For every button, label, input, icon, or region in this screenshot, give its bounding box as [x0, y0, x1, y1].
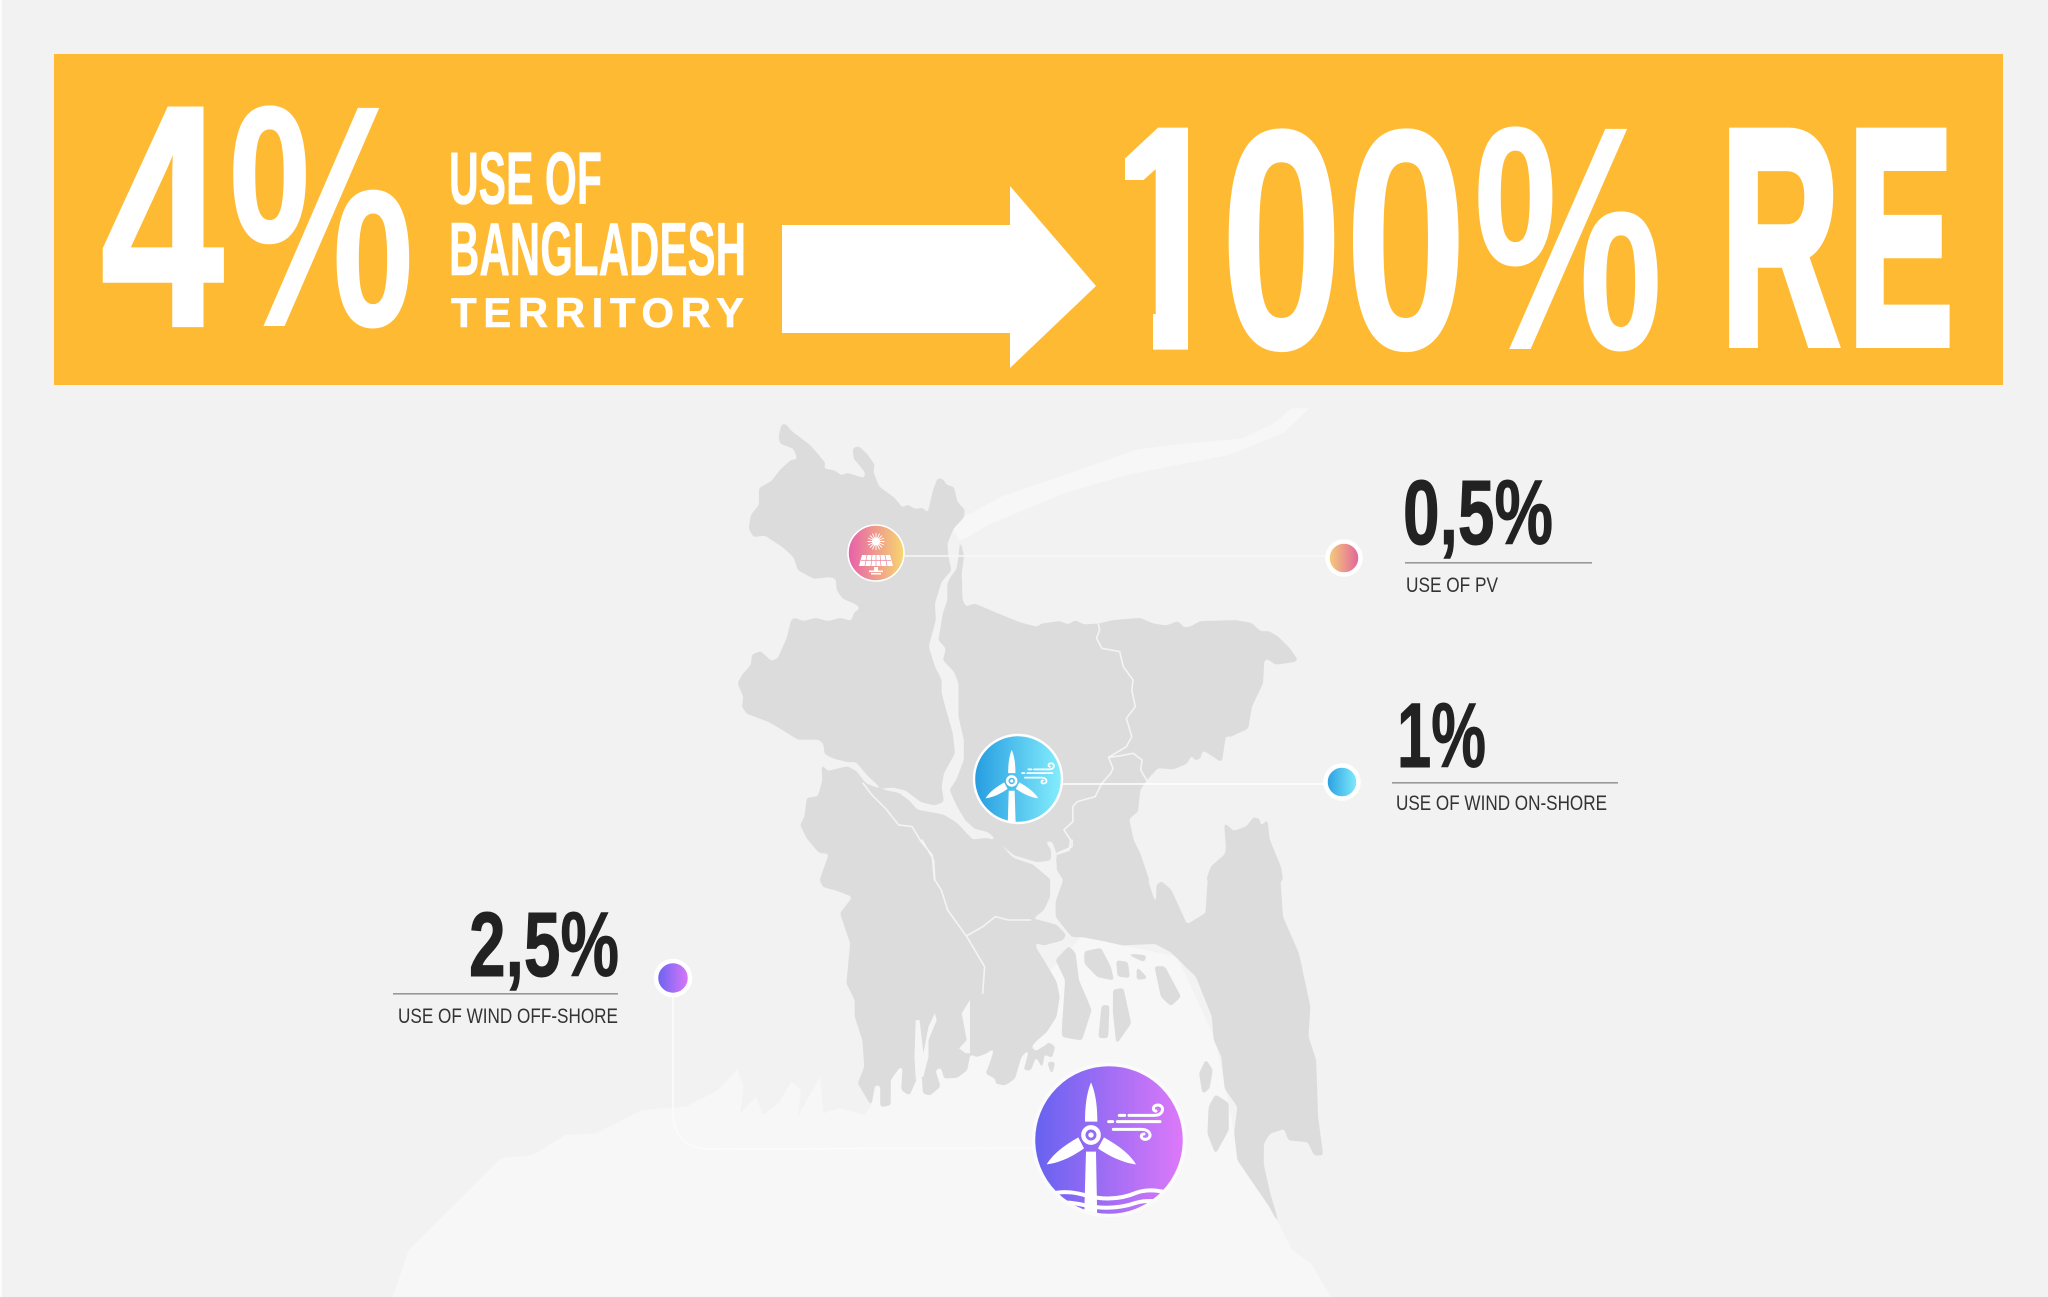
sea: Bay of Bengal	[393, 937, 1330, 1297]
heading: 100% RE: R	[1721, 67, 1840, 409]
icon: off-shore wind turbine	[1035, 1066, 1183, 1214]
callout: 0,5% use of PV	[1403, 462, 1592, 597]
text block: use of Bangladesh territory: TERRITORY	[451, 289, 744, 336]
icon: solar panel	[848, 525, 904, 581]
icon part: panel	[859, 555, 893, 574]
heading: 100% RE: %	[1473, 60, 1663, 417]
map: Bangladesh with bay and river	[393, 408, 1330, 1297]
waves	[1056, 1188, 1164, 1210]
heading: 100% RE: 0	[1220, 63, 1343, 416]
text block: use of Bangladesh territory: USE OF	[449, 137, 602, 220]
callout: 1% use of wind on-shore: 1%	[1397, 685, 1486, 787]
callout: 2,5% use of wind off-shore: 2,5%	[469, 894, 619, 996]
dot: wind off-shore	[656, 961, 690, 995]
land: country silhouette	[738, 424, 1323, 1225]
river: Brahmaputra inflow	[953, 408, 1309, 540]
heading: 100% RE: E	[1848, 66, 1953, 409]
heading: 4%: %	[228, 40, 415, 393]
heading: 4%	[100, 40, 415, 393]
callout: 2,5% use of wind off-shore	[393, 894, 619, 1028]
text block: use of Bangladesh territory: BANGLADESH	[449, 207, 746, 291]
connector: PV	[905, 555, 1326, 557]
heading: 100% RE: 0	[1344, 63, 1468, 416]
text block: use of Bangladesh territory	[449, 137, 746, 336]
arrow	[782, 186, 1096, 368]
heading: 100% RE	[1125, 126, 1950, 352]
heading: 100% RE: 1	[1105, 62, 1228, 416]
icon: on-shore wind turbine	[972, 734, 1064, 824]
land: inner rivers and channels	[863, 624, 1146, 1080]
dot: wind on-shore	[1326, 766, 1358, 798]
heading: 4%: 4	[100, 40, 225, 393]
dot: PV	[1328, 542, 1360, 574]
callout: 2,5% use of wind off-shore: USE OF WIND OFF-SHORE	[398, 1005, 618, 1028]
icon part: sun	[868, 533, 884, 550]
panel: banner	[54, 40, 2003, 417]
callout: 1% use of wind on-shore	[1392, 685, 1618, 815]
callout: 0,5% use of PV: 0,5%	[1403, 462, 1553, 564]
callout: 0,5% use of PV: USE OF PV	[1406, 574, 1498, 597]
callout: 1% use of wind on-shore: USE OF WIND ON-SHORE	[1396, 792, 1607, 815]
connector: wind off-shore	[673, 997, 1034, 1149]
connector: wind on-shore	[1062, 783, 1324, 785]
